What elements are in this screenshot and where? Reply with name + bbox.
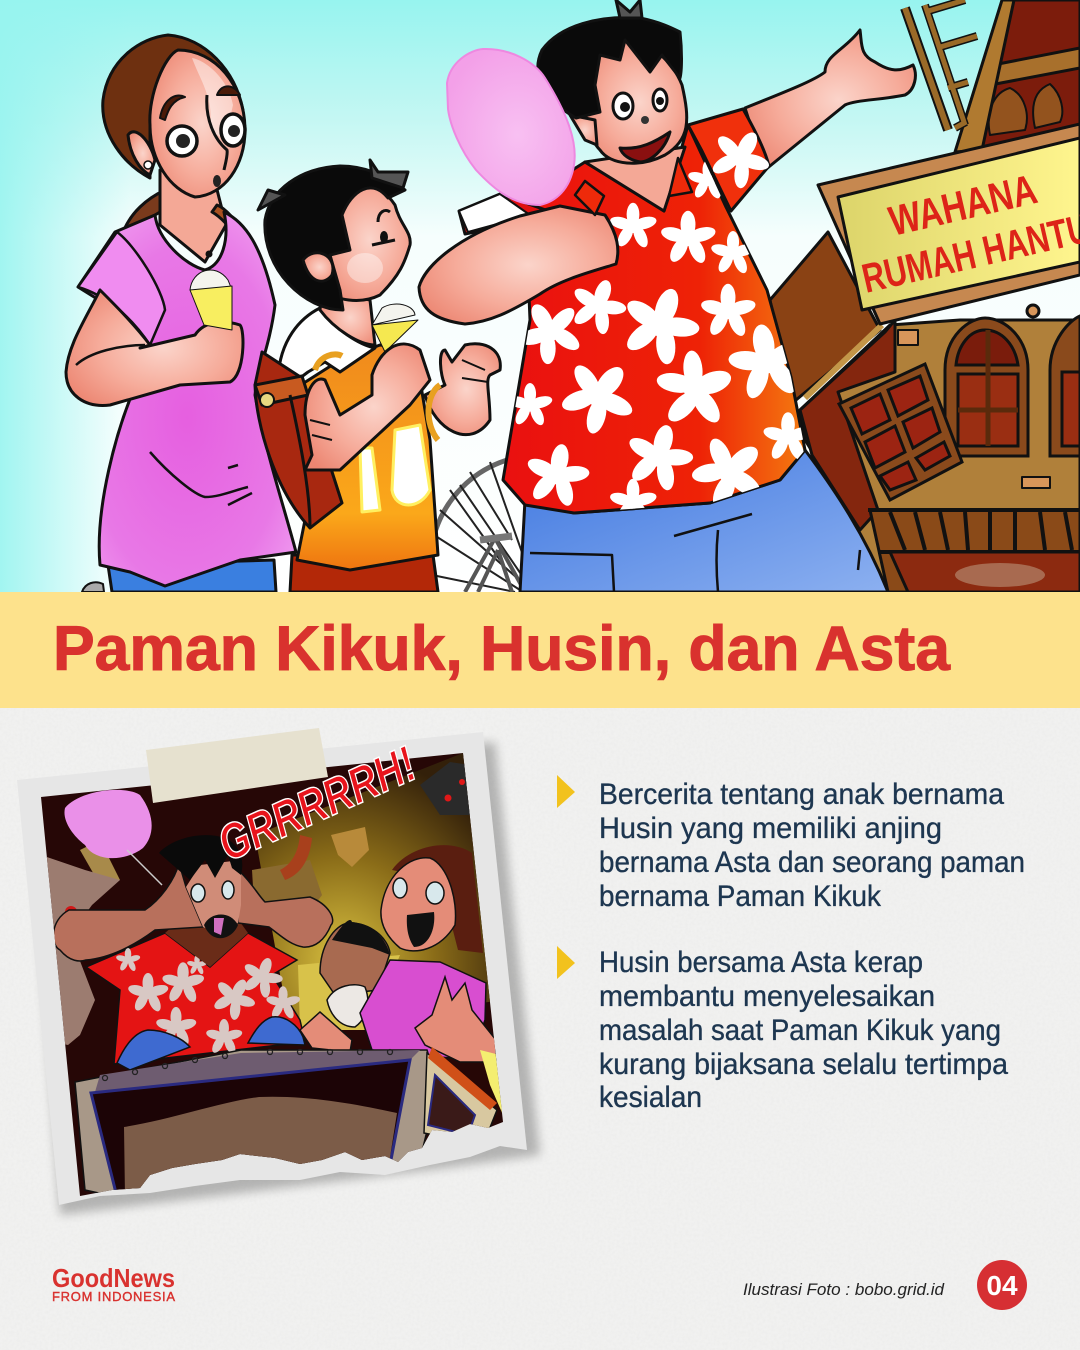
neck and head bbox=[318, 300, 376, 346]
dark backdrop bbox=[30, 745, 520, 1205]
sky background bbox=[0, 0, 1080, 592]
chandelier bbox=[331, 827, 369, 867]
bicycle wheel bbox=[437, 458, 521, 592]
ear bbox=[570, 115, 597, 145]
neck bbox=[585, 147, 685, 211]
broken window shutter bbox=[839, 364, 962, 500]
wooden beam bbox=[80, 840, 120, 885]
white sleeve bbox=[278, 308, 375, 378]
hair bbox=[538, 17, 682, 118]
title: Paman Kikuk, Husin, dan Asta bbox=[53, 614, 951, 684]
flower pattern bbox=[515, 162, 804, 510]
woman's hair bbox=[392, 845, 483, 953]
man's knees bbox=[117, 1017, 305, 1070]
bullet text: Husin bersama Asta kerap bbox=[599, 946, 923, 979]
ride cart bbox=[75, 1050, 438, 1197]
raised arm bbox=[745, 30, 915, 170]
eyes bbox=[613, 93, 633, 119]
sleeve bbox=[78, 232, 165, 345]
boy bbox=[320, 923, 390, 995]
pink shirt bbox=[78, 212, 296, 586]
left sleeve bbox=[459, 194, 560, 234]
golden cave glow bbox=[255, 753, 503, 1030]
ear bbox=[303, 253, 333, 281]
jeans and shoe bbox=[108, 560, 276, 592]
bullet text bbox=[599, 946, 1008, 1114]
haunted house building bbox=[770, 0, 1080, 592]
arms and hands bbox=[305, 344, 430, 470]
man's chest bbox=[165, 915, 248, 967]
bullet text: Husin yang memiliki anjing bbox=[599, 812, 942, 845]
bullet text bbox=[599, 778, 1025, 913]
logo: GoodNews from Indonesia: GoodNews bbox=[52, 1263, 175, 1293]
man's face bbox=[186, 860, 241, 932]
page number badge: 04 bbox=[986, 1270, 1018, 1301]
monster top right bbox=[420, 762, 470, 815]
head bbox=[582, 41, 687, 163]
collar flaps bbox=[575, 158, 692, 215]
hair bbox=[265, 166, 405, 310]
bullet text: masalah saat Paman Kikuk yang bbox=[599, 1014, 1001, 1047]
arm bbox=[66, 290, 243, 405]
polaroid photo: scary ride scene bbox=[17, 728, 540, 1215]
sleeve bbox=[688, 109, 769, 211]
page number badge bbox=[977, 1260, 1027, 1310]
illustration: Paman Kikuk family at the haunted house ride bbox=[0, 0, 1080, 592]
ear bbox=[128, 132, 155, 175]
arrow bullet bbox=[557, 946, 575, 979]
woman's hands bbox=[300, 1012, 352, 1052]
cotton candy bbox=[447, 49, 575, 205]
photo picture bbox=[30, 745, 520, 1205]
eye and brow bbox=[372, 210, 395, 245]
cart side panel bbox=[424, 1053, 497, 1145]
character: Paman Kikuk bbox=[419, 0, 915, 592]
woman's face bbox=[381, 858, 456, 951]
bullet text: bernama Asta dan seorang paman bbox=[599, 846, 1025, 879]
bullet point 2 bbox=[557, 946, 1008, 1114]
sign: Wahana Rumah Hantu bbox=[818, 124, 1080, 324]
shirt body bbox=[503, 125, 805, 513]
photo shadow bbox=[30, 742, 540, 1215]
bag bbox=[255, 352, 342, 528]
bullet text: bernama Paman Kikuk bbox=[599, 880, 882, 913]
shirt flowers bbox=[115, 948, 301, 1055]
man's arms bbox=[53, 863, 203, 961]
ice cream bbox=[190, 270, 232, 290]
bullet point 1 bbox=[557, 775, 1025, 913]
bag strap bbox=[212, 205, 270, 285]
bent arm bbox=[419, 206, 618, 324]
neck bbox=[160, 170, 226, 262]
trousers bbox=[520, 450, 888, 592]
cart rivets bbox=[102, 1050, 392, 1080]
logo: GoodNews from Indonesia: FROM INDONESIA bbox=[52, 1289, 175, 1304]
photo credit: Ilustrasi Foto : bobo.grid.id bbox=[743, 1280, 945, 1299]
monster left bbox=[41, 855, 120, 1045]
bullet text: kesialan bbox=[599, 1081, 702, 1114]
eyebrows, nose line and mouth bbox=[160, 86, 240, 120]
character: woman (Husin's mother) bbox=[66, 35, 296, 592]
ponytail bbox=[124, 192, 158, 227]
shirt folds bbox=[150, 452, 252, 505]
arrow bullet bbox=[557, 775, 575, 808]
ice cream bbox=[372, 304, 415, 325]
man shirt bbox=[86, 933, 305, 1064]
mouth bbox=[620, 132, 670, 162]
face bbox=[150, 50, 245, 197]
sign: Wahana Rumah Hantu: WAHANA bbox=[884, 165, 1041, 245]
logo: GoodNews from Indonesia bbox=[52, 1263, 175, 1304]
cotton candy bbox=[64, 790, 152, 858]
character: boy Husin bbox=[255, 160, 500, 592]
horned skull bbox=[252, 860, 322, 925]
photo frame bbox=[17, 732, 527, 1205]
orange shirt bbox=[285, 345, 438, 570]
yellow title banner bbox=[0, 592, 1080, 708]
red shorts bbox=[290, 555, 438, 592]
dog bbox=[327, 985, 368, 1027]
arched windows bbox=[945, 316, 1080, 456]
sound effect text: GRRRRRH! bbox=[210, 735, 424, 872]
bullet text: kurang bijaksana selalu tertimpa bbox=[599, 1048, 1008, 1081]
eyes bbox=[167, 126, 197, 156]
bullet text: membantu menyelesaikan bbox=[599, 980, 935, 1013]
hair bbox=[103, 35, 243, 178]
woman's shirt bbox=[360, 960, 486, 1060]
bullet text: Bercerita tentang anak bernama bbox=[599, 778, 1004, 811]
tape strip bbox=[146, 728, 328, 803]
